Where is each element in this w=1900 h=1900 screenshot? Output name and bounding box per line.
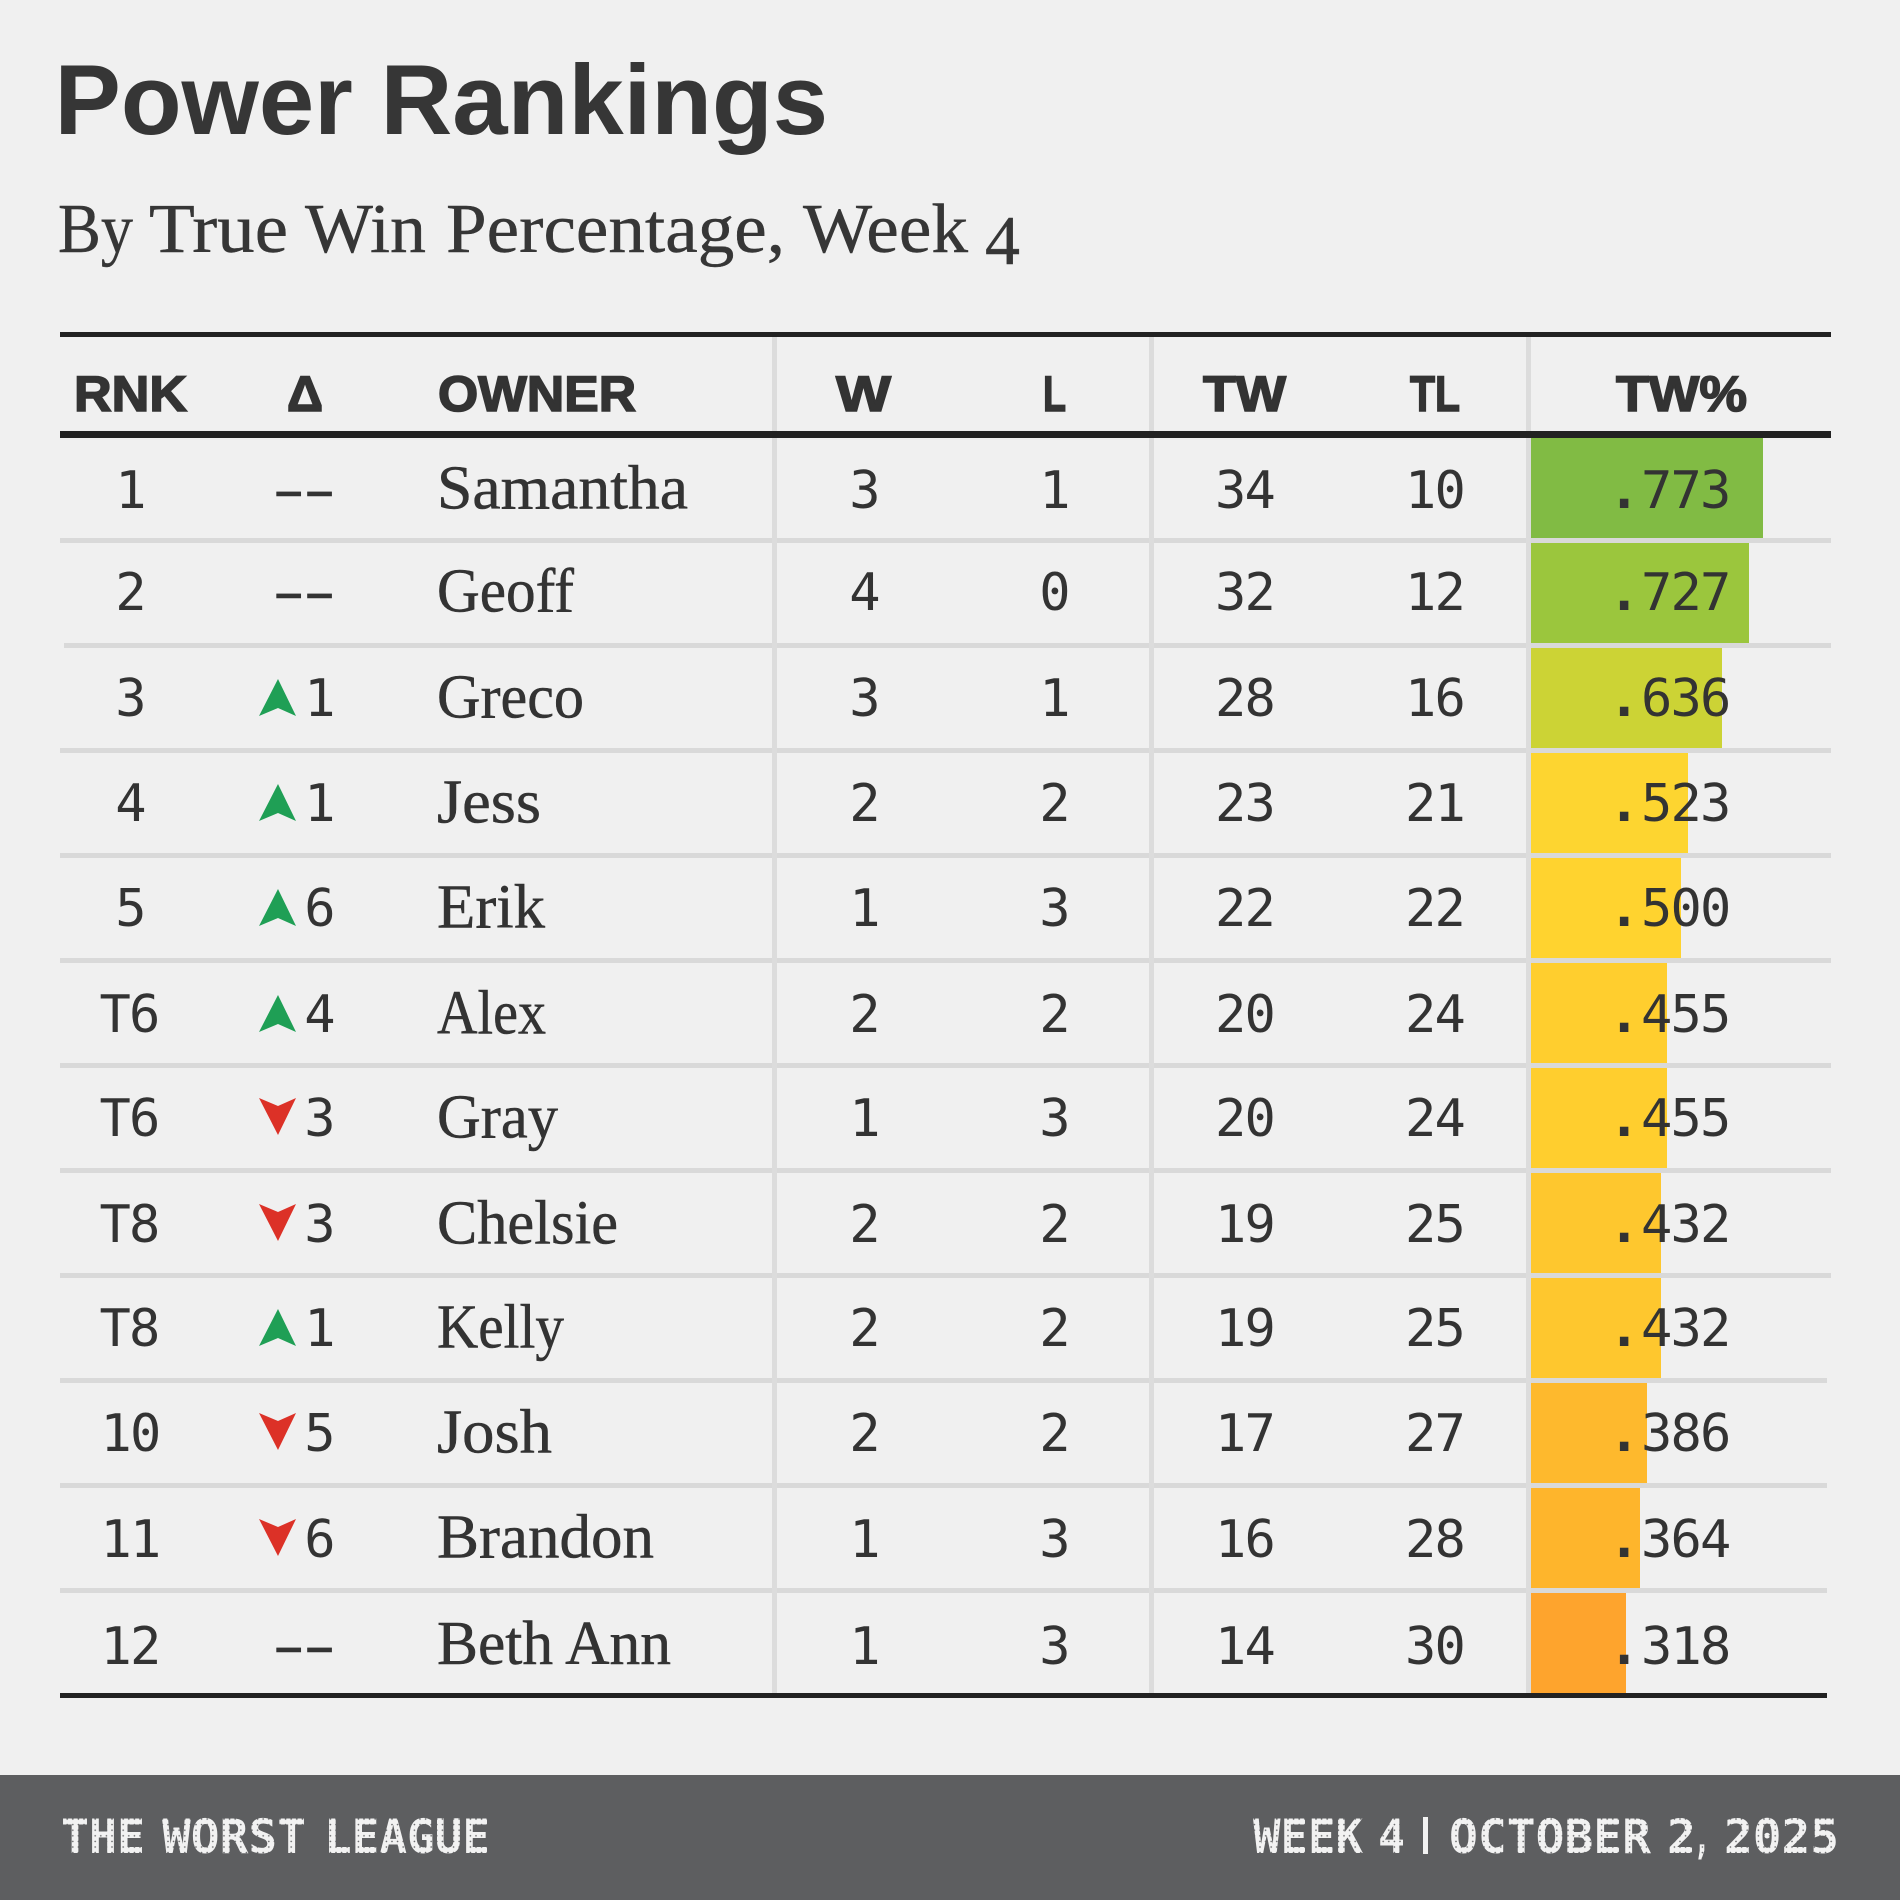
row 3: Greco: 3 xyxy=(849,669,879,729)
row 1: Samantha: -- xyxy=(260,460,332,520)
row 5: Erik: .500 xyxy=(1608,879,1730,939)
row 8: Chelsie: 2 xyxy=(1039,1195,1069,1255)
row 3: Greco: 16 xyxy=(1405,669,1464,729)
icon: up arrow xyxy=(259,1309,296,1346)
icon: down arrow xyxy=(259,1098,296,1135)
row 1: Samantha: .773 xyxy=(1608,461,1730,521)
row 1: Samantha: 3 xyxy=(849,461,879,521)
footer date: 4 xyxy=(1378,1810,1405,1865)
bar .636 xyxy=(1531,648,1722,748)
row 6: Alex xyxy=(99,963,1730,1063)
icon: down arrow xyxy=(259,1413,296,1450)
row 1: Samantha: 34 xyxy=(1215,461,1274,521)
footer date: WEEK xyxy=(1253,1810,1364,1865)
row 5: Erik xyxy=(115,858,1730,958)
row 8: Chelsie xyxy=(99,1173,1730,1273)
row 9: Kelly: 2 xyxy=(849,1299,879,1359)
row 9: Kelly: 2 xyxy=(1039,1299,1069,1359)
row 8: Chelsie: 19 xyxy=(1215,1195,1274,1255)
row 10: Josh: 2 xyxy=(849,1404,879,1464)
row 7: Gray: Gray xyxy=(437,1084,558,1152)
row 8: Chelsie: 2 xyxy=(849,1195,879,1255)
bar .500 xyxy=(1531,858,1681,958)
bar .523 xyxy=(1531,753,1688,853)
row 6: Alex: 4 xyxy=(304,985,334,1045)
header row: OWNER xyxy=(438,366,636,422)
footer band xyxy=(0,1775,1900,1900)
header row: TW% xyxy=(1616,366,1747,422)
row 5: Erik: Erik xyxy=(437,874,545,942)
row 9: Kelly: 19 xyxy=(1215,1299,1274,1359)
footer date xyxy=(1253,1810,1839,1865)
row 5: Erik: 3 xyxy=(1039,879,1069,939)
row 4: Jess: 2 xyxy=(1039,774,1069,834)
row 12: Beth Ann: 30 xyxy=(1405,1617,1464,1677)
row 1: Samantha xyxy=(115,438,1763,538)
footer date: OCTOBER xyxy=(1449,1810,1652,1865)
row 7: Gray: 3 xyxy=(1039,1089,1069,1149)
row 2: Geoff: 2 xyxy=(115,563,145,623)
row 8: Chelsie: T8 xyxy=(99,1195,159,1255)
subtitle: Win xyxy=(305,191,426,268)
row 11: Brandon: .364 xyxy=(1608,1510,1730,1570)
icon: up arrow xyxy=(259,679,296,716)
icon: up arrow xyxy=(259,889,296,926)
row 3: Greco: 1 xyxy=(1039,669,1069,729)
row 5: Erik: 22 xyxy=(1215,879,1274,939)
row 2: Geoff: .727 xyxy=(1608,563,1730,623)
subtitle: Week xyxy=(803,191,968,268)
row 12: Beth Ann: 3 xyxy=(1039,1617,1069,1677)
bar .727 xyxy=(1531,543,1749,643)
row 2: Geoff xyxy=(115,543,1749,643)
bar .364 xyxy=(1531,1488,1640,1588)
row 4: Jess: 1 xyxy=(304,774,334,834)
row 7: Gray: T6 xyxy=(99,1089,159,1149)
row 2: Geoff: 32 xyxy=(1215,563,1274,623)
row 7: Gray: 24 xyxy=(1405,1089,1464,1149)
row 12: Beth Ann: .318 xyxy=(1608,1617,1730,1677)
row 4: Jess: 23 xyxy=(1215,774,1274,834)
row 5: Erik: 5 xyxy=(115,879,145,939)
row 11: Brandon: 28 xyxy=(1405,1510,1464,1570)
header row: Δ xyxy=(287,366,323,422)
header row: W xyxy=(836,366,892,422)
row 8: Chelsie: 3 xyxy=(304,1195,334,1255)
header row: TL xyxy=(1410,366,1460,422)
row 6: Alex: Alex xyxy=(437,980,546,1048)
footer xyxy=(0,1775,1900,1900)
bar .432 xyxy=(1531,1173,1661,1273)
icon: down arrow xyxy=(259,1204,296,1241)
bar .432 xyxy=(1531,1278,1661,1378)
icon: up arrow xyxy=(259,995,296,1032)
row 5: Erik: 6 xyxy=(304,879,334,939)
row 9: Kelly: .432 xyxy=(1608,1299,1730,1359)
row 7: Gray: 1 xyxy=(849,1089,879,1149)
row 5: Erik: 1 xyxy=(849,879,879,939)
row 12: Beth Ann: 1 xyxy=(849,1617,879,1677)
row 4: Jess: Jess xyxy=(437,768,541,836)
row 10: Josh: 2 xyxy=(1039,1404,1069,1464)
row 1: Samantha: 10 xyxy=(1405,461,1464,521)
row 6: Alex: .455 xyxy=(1608,985,1730,1045)
row 10: Josh: Josh xyxy=(437,1398,552,1466)
table xyxy=(60,332,1831,1698)
row 12: Beth Ann: 14 xyxy=(1215,1617,1274,1677)
row 7: Gray: 3 xyxy=(304,1089,334,1149)
header row xyxy=(74,366,1747,422)
top rule xyxy=(60,332,1831,337)
row 2: Geoff: Geoff xyxy=(437,558,574,626)
subtitle: True xyxy=(149,191,288,268)
row 3: Greco: 1 xyxy=(304,669,334,729)
icon: up arrow xyxy=(259,784,296,821)
icon: down arrow xyxy=(259,1519,296,1556)
row 4: Jess: 4 xyxy=(115,774,145,834)
row 1: Samantha: 1 xyxy=(115,461,145,521)
row 12: Beth Ann: Beth Ann xyxy=(437,1610,671,1678)
row 3: Greco xyxy=(115,648,1730,748)
row 10: Josh: 27 xyxy=(1405,1404,1464,1464)
header row: RNK xyxy=(74,366,187,422)
column dividers xyxy=(772,337,1531,1693)
row 11: Brandon: 6 xyxy=(304,1510,334,1570)
subtitle: Percentage, xyxy=(446,191,785,268)
row 6: Alex: 2 xyxy=(1039,985,1069,1045)
row 10: Josh: 5 xyxy=(304,1404,334,1464)
footer league name: THE xyxy=(61,1810,145,1865)
row 2: Geoff: 12 xyxy=(1405,563,1464,623)
row 8: Chelsie: Chelsie xyxy=(437,1190,618,1258)
row 9: Kelly: 1 xyxy=(304,1299,334,1359)
row 9: Kelly: 25 xyxy=(1405,1299,1464,1359)
row 2: Geoff: 4 xyxy=(849,563,879,623)
row 3: Greco: .636 xyxy=(1608,669,1730,729)
row 9: Kelly xyxy=(99,1278,1730,1378)
row 1: Samantha: 1 xyxy=(1039,461,1069,521)
row 4: Jess: 21 xyxy=(1405,774,1464,834)
row 2: Geoff: 0 xyxy=(1039,563,1069,623)
header row: L xyxy=(1043,366,1066,422)
row 10: Josh: 17 xyxy=(1215,1404,1274,1464)
row 9: Kelly: Kelly xyxy=(437,1294,564,1362)
row 12: Beth Ann: 12 xyxy=(100,1617,160,1677)
row 6: Alex: 24 xyxy=(1405,985,1464,1045)
row 2: Geoff: -- xyxy=(260,562,332,622)
row 1: Samantha: Samantha xyxy=(437,454,688,522)
row 12: Beth Ann xyxy=(100,1593,1730,1693)
row 6: Alex: T6 xyxy=(99,985,159,1045)
bar .455 xyxy=(1531,1068,1667,1168)
bar .455 xyxy=(1531,963,1667,1063)
row 11: Brandon xyxy=(100,1488,1730,1588)
row 10: Josh: .386 xyxy=(1608,1404,1730,1464)
row 12: Beth Ann: -- xyxy=(260,1616,332,1676)
row 11: Brandon: 1 xyxy=(849,1510,879,1570)
row 4: Jess: 2 xyxy=(849,774,879,834)
row 5: Erik: 22 xyxy=(1405,879,1464,939)
subtitle xyxy=(58,191,1020,280)
row 11: Brandon: Brandon xyxy=(437,1504,654,1572)
row 6: Alex: 20 xyxy=(1215,985,1274,1045)
bottom rule xyxy=(60,1693,1827,1698)
subtitle: By xyxy=(58,191,133,268)
row separators xyxy=(60,538,1831,1593)
subtitle: 4 xyxy=(985,203,1020,280)
footer league name: WORST xyxy=(162,1810,306,1865)
footer league name xyxy=(61,1810,490,1865)
row 11: Brandon: 11 xyxy=(100,1510,160,1570)
row 4: Jess xyxy=(115,753,1730,853)
footer date: , xyxy=(1693,1810,1711,1865)
row 6: Alex: 2 xyxy=(849,985,879,1045)
row 7: Gray: .455 xyxy=(1608,1089,1730,1149)
footer date: 2025 xyxy=(1724,1810,1839,1865)
row 11: Brandon: 16 xyxy=(1215,1510,1274,1570)
footer league name: LEAGUE xyxy=(324,1810,490,1865)
bar .318 xyxy=(1531,1593,1626,1693)
bar .386 xyxy=(1531,1383,1647,1483)
title: Power Rankings xyxy=(54,44,828,155)
row 3: Greco: Greco xyxy=(437,664,584,732)
row 4: Jess: .523 xyxy=(1608,774,1730,834)
bar .773 xyxy=(1531,438,1763,538)
row 10: Josh: 10 xyxy=(100,1404,160,1464)
row 7: Gray xyxy=(99,1068,1730,1168)
header row: TW xyxy=(1203,366,1287,422)
row 10: Josh xyxy=(100,1383,1730,1483)
row 9: Kelly: T8 xyxy=(99,1299,159,1359)
row 7: Gray: 20 xyxy=(1215,1089,1274,1149)
row 8: Chelsie: 25 xyxy=(1405,1195,1464,1255)
row 3: Greco: 3 xyxy=(115,669,145,729)
footer date: 2 xyxy=(1667,1810,1696,1865)
row 3: Greco: 28 xyxy=(1215,669,1274,729)
row 11: Brandon: 3 xyxy=(1039,1510,1069,1570)
header rule xyxy=(60,431,1831,438)
row 8: Chelsie: .432 xyxy=(1608,1195,1730,1255)
